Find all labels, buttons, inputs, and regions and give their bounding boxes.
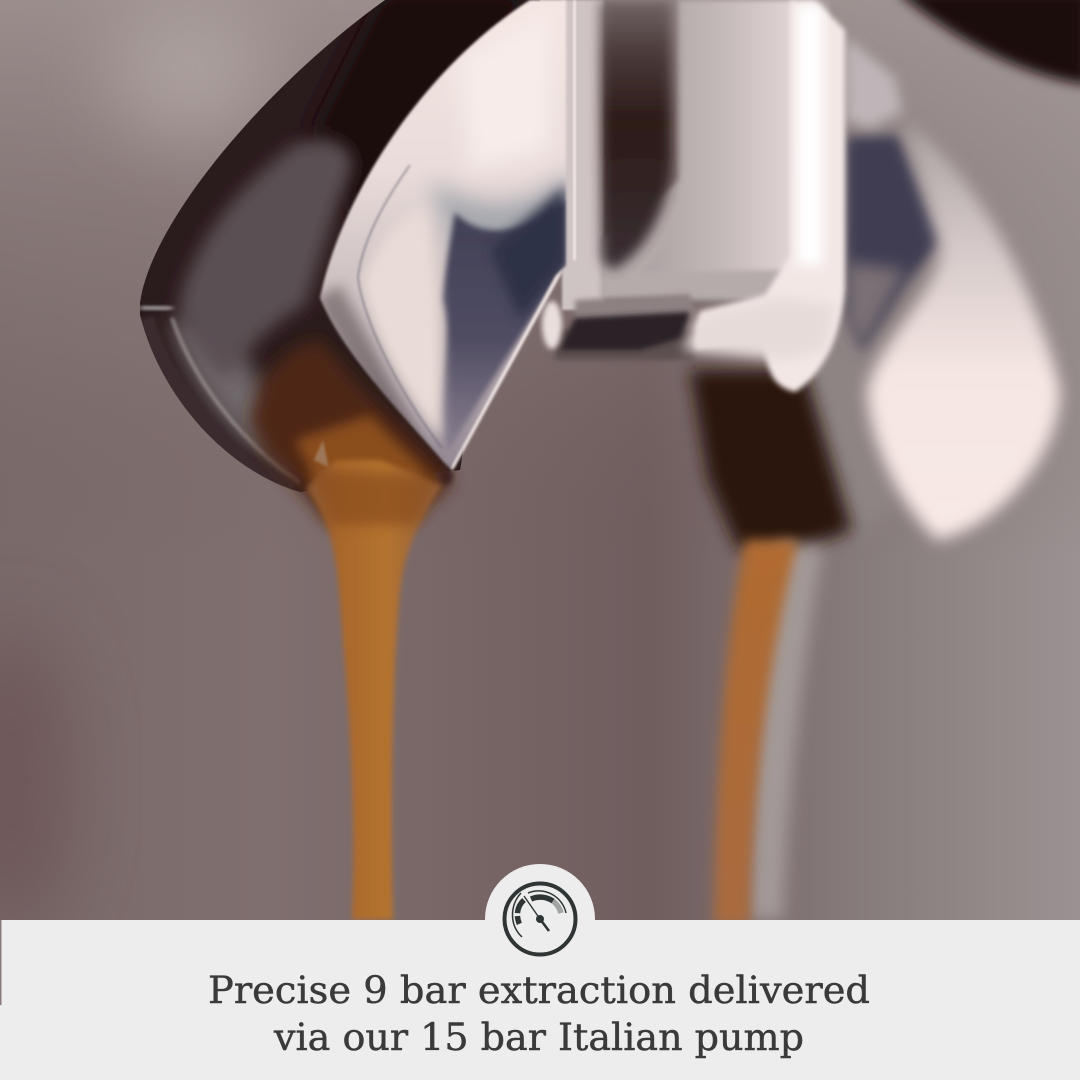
gauge thick arc left: [517, 900, 525, 932]
right navy reflection: [846, 135, 942, 352]
caption text: [208, 969, 870, 1059]
right mid grey shadow: [800, 300, 930, 535]
facet bright edge: [450, 266, 570, 470]
dark top right machine corner: [895, 0, 1080, 85]
right top knob: [846, 37, 902, 128]
spout dark base: [140, 0, 540, 492]
column base dark bar: [560, 312, 690, 350]
icon circle tab: [485, 864, 595, 974]
icon: pressure gauge: [504, 884, 576, 954]
spout body: [140, 0, 540, 492]
right coffee stream: [714, 540, 798, 925]
caption band: [0, 864, 1080, 1080]
facet dark reflection: [442, 200, 566, 452]
gauge outer arc top: [528, 891, 566, 913]
spout rim glint: [140, 307, 172, 309]
band background: [0, 920, 1080, 1080]
column base highlight: [683, 298, 835, 360]
central metal column: [555, 0, 845, 392]
facet pale edge line: [358, 165, 442, 448]
spout outer rim: [146, 318, 292, 488]
spout silver facet: [318, 0, 568, 472]
out of focus right spout: [690, 37, 1060, 925]
facet top bright: [466, 32, 548, 165]
coffee falling stream: [306, 460, 442, 920]
stream upper shade: [310, 470, 440, 525]
spout upper shadow: [304, 0, 518, 222]
caption line 1: Precise 9 bar extraction delivered: [208, 969, 870, 1012]
spout textured face: [180, 140, 352, 380]
column base grey bar: [575, 294, 695, 322]
column bright band: [690, 0, 845, 392]
right grey stream shadow: [748, 545, 824, 920]
tip shadow: [437, 467, 453, 485]
facet left shadow: [320, 282, 426, 440]
column grey lower panel: [600, 180, 795, 300]
gauge outer arc left: [512, 893, 522, 937]
facet grey blue haze: [425, 168, 566, 253]
spout lower silver wash: [170, 320, 310, 480]
right column edge line: [565, 0, 567, 262]
small rivet: [542, 301, 562, 349]
crema glint: [314, 440, 329, 468]
left in-focus spout: [120, 0, 580, 525]
column base shadow: [555, 330, 695, 360]
gauge thick arc top: [531, 897, 553, 901]
column dark reflection: [600, 0, 672, 270]
right spout highlight blob: [867, 122, 1060, 540]
caption line 2: via our 15 bar Italian pump: [273, 1016, 804, 1059]
spout lower rim highlight: [172, 318, 300, 482]
coffee pooling in spout: [250, 340, 452, 525]
gauge needle: [524, 896, 540, 919]
coffee stream left: [306, 460, 442, 920]
left light strip: [562, 0, 604, 310]
facet base: [318, 0, 567, 472]
right dark dripper: [690, 370, 852, 550]
facet pale inner: [362, 210, 442, 440]
column grey panel: [640, 0, 795, 272]
